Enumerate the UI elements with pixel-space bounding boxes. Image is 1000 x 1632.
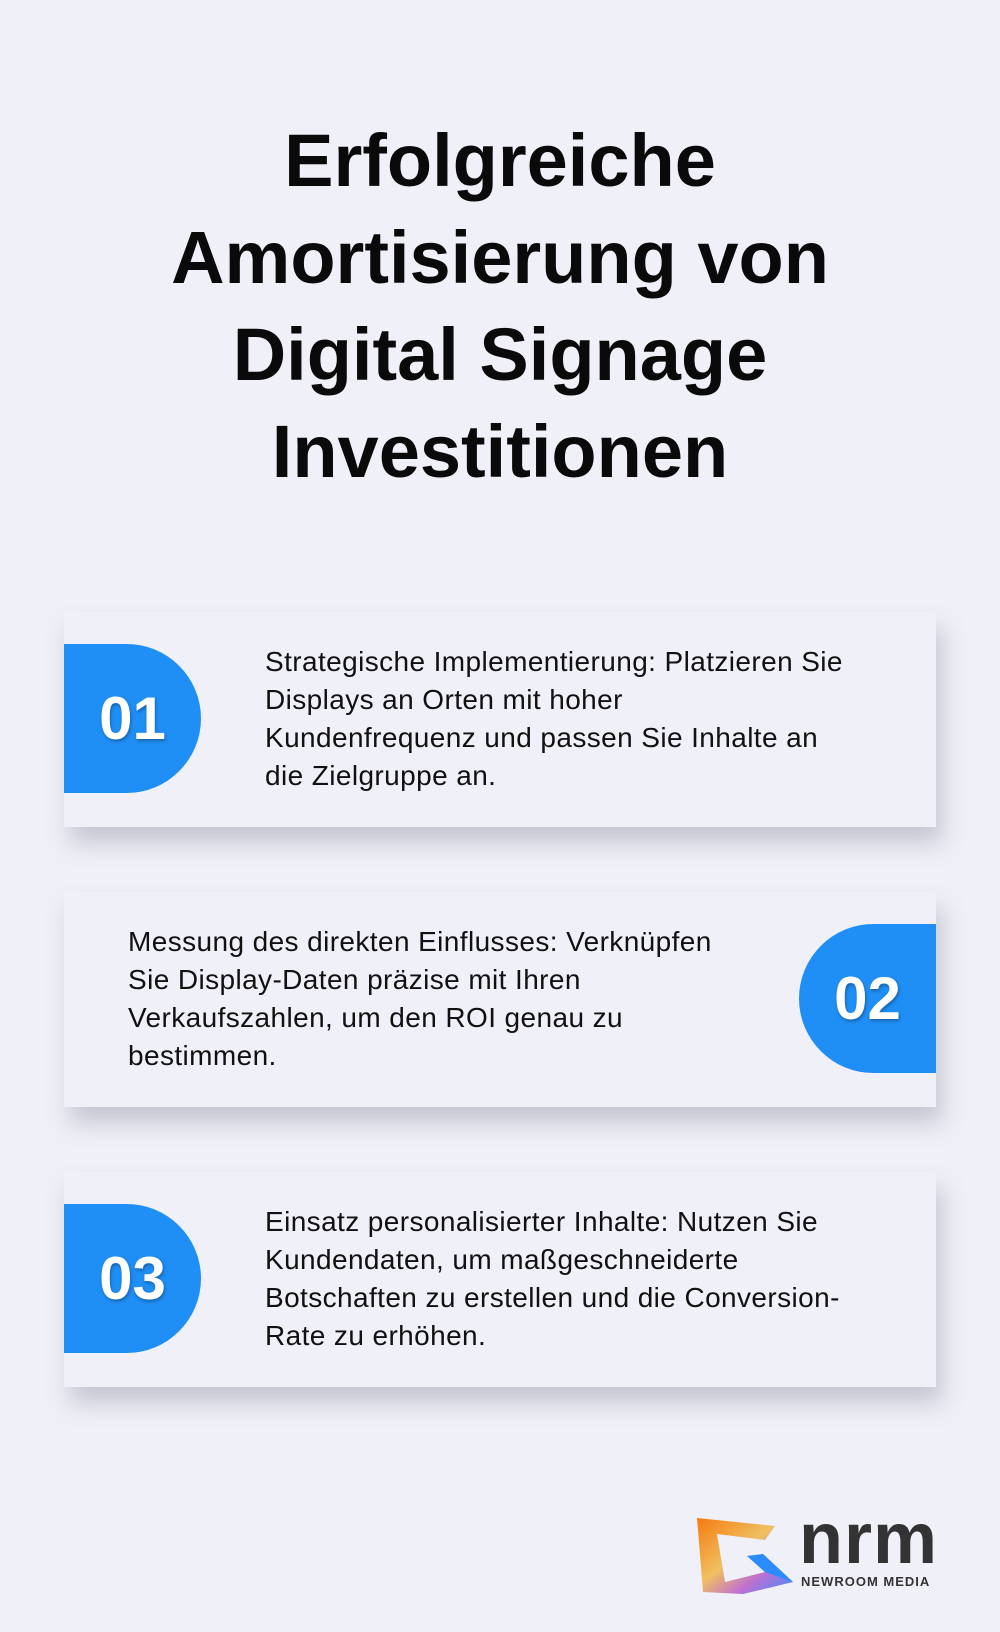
- badge 03: 03: [99, 1245, 166, 1312]
- badge 02: 02: [834, 965, 901, 1032]
- text 1: [265, 646, 843, 791]
- logo: [697, 1499, 938, 1594]
- text 2: [128, 926, 712, 1071]
- badge 02: [799, 924, 936, 1073]
- text 2: Messung des direkten Einflusses: Verknüpfen: [128, 926, 712, 957]
- icon: logo mark: [697, 1518, 793, 1594]
- badge 01: 01: [99, 685, 166, 752]
- badge 01: [64, 644, 201, 793]
- logo text: nrm: [799, 1499, 938, 1579]
- title: Amortisierung von: [171, 216, 829, 299]
- title: Erfolgreiche: [284, 119, 716, 202]
- text 3: [265, 1206, 840, 1351]
- panel: step 2: [64, 892, 936, 1107]
- text 3: Kundendaten, um maßgeschneiderte: [265, 1244, 739, 1275]
- text 3: Einsatz personalisierter Inhalte: Nutzen Sie: [265, 1206, 818, 1237]
- panel: step 1: [64, 612, 936, 827]
- text 1: die Zielgruppe an.: [265, 760, 496, 791]
- panel: step 3: [64, 1172, 936, 1387]
- text 1: Kundenfrequenz und passen Sie Inhalte an: [265, 722, 818, 753]
- text 2: Sie Display-Daten präzise mit Ihren: [128, 964, 581, 995]
- text 1: Strategische Implementierung: Platzieren Sie: [265, 646, 843, 677]
- text 2: Verkaufszahlen, um den ROI genau zu: [128, 1002, 623, 1033]
- text 3: Botschaften zu erstellen und die Conversion-: [265, 1282, 840, 1313]
- text 1: Displays an Orten mit hoher: [265, 684, 623, 715]
- logo: NEWROOM MEDIA: [801, 1574, 930, 1589]
- badge 03: [64, 1204, 201, 1353]
- title: Digital Signage: [233, 313, 767, 396]
- title: [171, 119, 829, 493]
- text 2: bestimmen.: [128, 1040, 277, 1071]
- text 3: Rate zu erhöhen.: [265, 1320, 486, 1351]
- title: Investitionen: [272, 410, 728, 493]
